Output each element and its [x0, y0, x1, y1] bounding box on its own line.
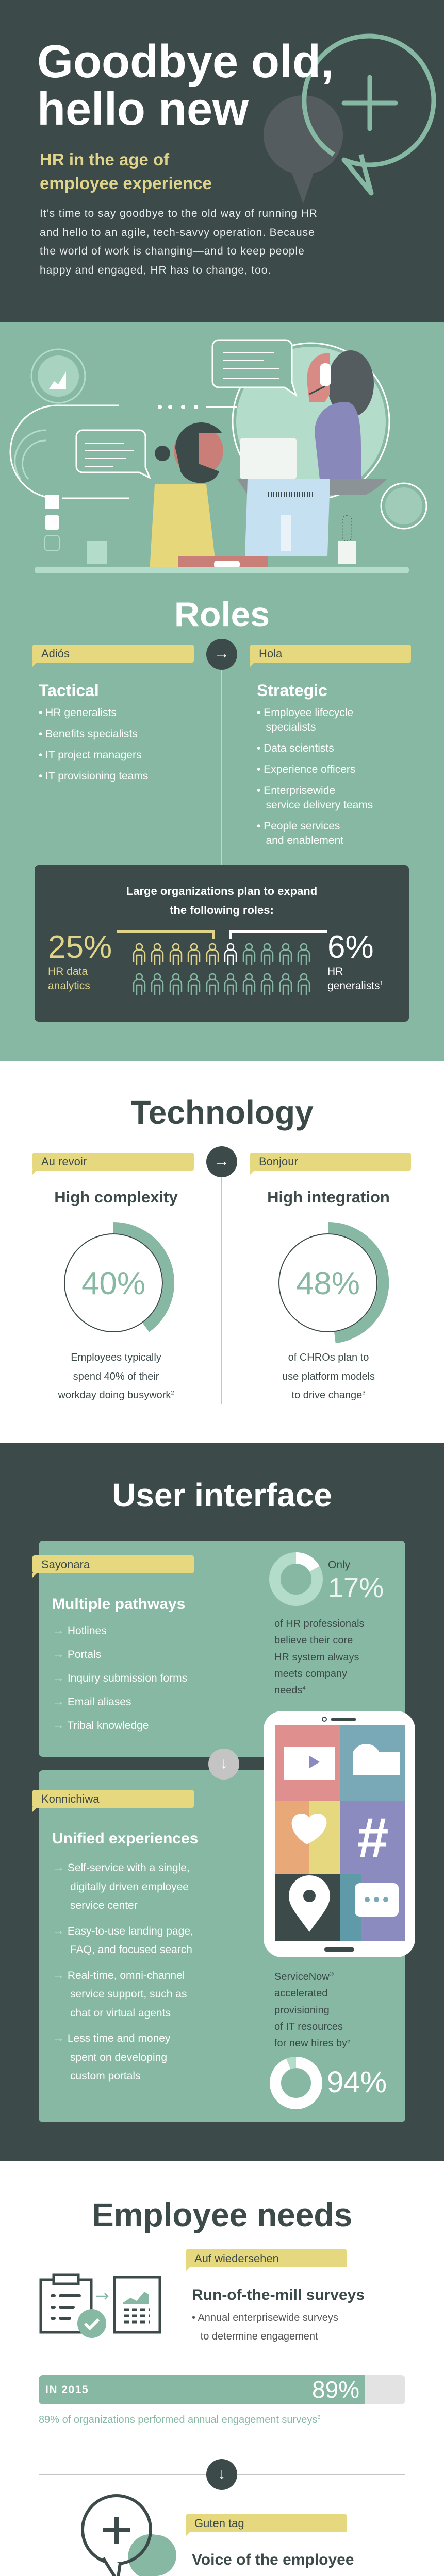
intro text: happy and engaged, HR has to change, too.	[40, 264, 271, 276]
tag: Guten tag: Guten tag	[194, 2517, 244, 2530]
stat: 6%: HR	[327, 965, 343, 977]
heading: high integration: High integration	[267, 1188, 390, 1206]
stat: 94%: 94%	[327, 2065, 387, 2099]
run-of-the-mill text: to determine engagement	[201, 2331, 318, 2342]
phone illustration	[264, 1711, 415, 1957]
unified experiences list: digitally driven employee	[70, 1880, 189, 1893]
caption: CHROs	[282, 1352, 375, 1401]
arrow circle	[206, 639, 237, 670]
stat text: needs4	[274, 1685, 306, 1696]
pictogram chart	[117, 930, 327, 995]
divider with arrow: ↓	[218, 2465, 226, 2482]
stat: 25%: analytics	[48, 980, 90, 992]
unified experiences list: → Less time and money	[52, 2031, 170, 2045]
stat text: provisioning	[274, 1971, 350, 2049]
panel: strategic: • Experience officers	[257, 764, 355, 775]
caption: busywork: workday doing busywork2	[58, 1389, 174, 1401]
donut: 48%: 48%	[296, 1266, 360, 1301]
divider	[221, 1162, 222, 1404]
unified experiences list: custom portals	[70, 2070, 141, 2082]
stat: 25%: HR data	[48, 965, 88, 977]
bar chart: 2015: 89%	[312, 2376, 359, 2403]
donut: 94%	[270, 2057, 322, 2109]
intro text: It’s time to say goodbye to the old way of running HR	[40, 208, 318, 219]
icon: clipboard to report	[39, 2273, 161, 2338]
stat: 6%: generalists1	[327, 980, 383, 992]
stat text: HR system always	[274, 1652, 359, 1663]
stat: 17%: Only	[328, 1559, 350, 1571]
donut: 40%: 40%	[81, 1266, 145, 1301]
bar chart: 2015: IN 2015	[45, 2384, 89, 2396]
heading: Roles: Roles	[174, 595, 270, 634]
panel: tactical: • HR generalists	[39, 707, 117, 719]
tag: Au revoir: Au revoir	[41, 1155, 87, 1168]
tag: Sayonara	[32, 1555, 194, 1573]
panel: tactical: • IT provisioning teams	[39, 770, 148, 782]
panel: strategic: service delivery teams	[266, 799, 373, 811]
stat: 6%: 6%	[327, 929, 374, 965]
icon: voice bubbles	[81, 2494, 176, 2576]
stat: 17%: 17%	[328, 1572, 384, 1603]
panel: roles expansion stat	[35, 865, 409, 1022]
run-of-the-mill text: Run-of-the-mill surveys	[192, 2286, 365, 2303]
unified experiences list: → Real-time, omni-channel	[52, 1968, 185, 1981]
panel: strategic: • Data scientists	[257, 742, 334, 754]
panel: tactical: Tactical	[39, 681, 99, 700]
stat text: provisioning: for new hires by5	[274, 2038, 350, 2049]
tag: Konnichiwa	[32, 1790, 194, 1808]
arrow circle: →	[214, 1153, 229, 1170]
panel: strategic: • Enterprisewide	[257, 785, 335, 796]
subtitle	[40, 150, 212, 193]
stat text: of HR professionals	[274, 1618, 365, 1630]
unified experiences list: spent on developing	[70, 2052, 167, 2063]
caption: CHROs: to drive change3	[292, 1389, 365, 1401]
tag: Bonjour: Bonjour	[259, 1155, 298, 1168]
subtitle: HR in the age of	[40, 150, 169, 169]
stat heading	[126, 885, 317, 917]
stat text: provisioning: of IT resources	[274, 2021, 343, 2032]
unified experiences list: service center	[70, 1900, 138, 1911]
stat text: meets company	[274, 1668, 347, 1680]
unified experiences list: FAQ, and focused search	[70, 1944, 192, 1956]
caption: busywork: Employees typically	[71, 1352, 161, 1363]
panel: strategic: and enablement	[266, 835, 343, 846]
phone illustration: #	[357, 1806, 389, 1870]
down arrow circle: ↓	[220, 1755, 228, 1772]
stat text: provisioning: accelerated	[274, 1988, 327, 1999]
tag: Sayonara: Sayonara	[41, 1558, 90, 1571]
voice of the employee text: Voice of the employee	[192, 2551, 354, 2568]
stat text: provisioning: provisioning	[274, 2005, 330, 2016]
unified experiences list: service support, such as	[70, 1988, 187, 2000]
donut: 48%	[278, 1222, 389, 1344]
stat: 6%	[327, 929, 383, 992]
icon: speech bubbles with plus	[264, 34, 436, 203]
multiple pathways list: → Tribal knowledge	[52, 1718, 149, 1732]
stat: 17%	[328, 1559, 384, 1603]
intro text: the world of work is changing—and to keep people	[40, 245, 305, 257]
bar chart: 2015	[39, 2375, 405, 2404]
tag: Hola: Hola	[259, 647, 282, 660]
panel: strategic	[257, 681, 373, 846]
unified experiences list: Unified experiences	[52, 1830, 198, 1847]
run-of-the-mill text	[192, 2286, 365, 2342]
panel: strategic: specialists	[266, 721, 316, 733]
unified experiences list: chat or virtual agents	[70, 2007, 171, 2019]
unified experiences list: → Self-service with a single,	[52, 1860, 190, 1874]
tag: Adiós	[32, 645, 194, 663]
tag: Auf wiedersehen	[186, 2249, 347, 2267]
heading: Technology: Technology	[130, 1094, 314, 1131]
tag: Konnichiwa: Konnichiwa	[41, 1792, 100, 1805]
arrow circle	[206, 1146, 237, 1177]
subtitle: employee experience	[40, 174, 212, 193]
panel: strategic: Strategic	[257, 681, 327, 700]
stat: 25%	[48, 929, 112, 992]
caption: busywork: spend 40% of their	[73, 1370, 159, 1382]
tag: Guten tag	[186, 2514, 347, 2532]
heading: User interface: User interface	[112, 1477, 332, 1514]
run-of-the-mill text: • Annual enterprisewide surveys	[192, 2312, 338, 2324]
multiple pathways list: Multiple pathways	[52, 1596, 185, 1613]
caption: CHROs: of CHROs plan to	[288, 1352, 369, 1363]
tag: Auf wiedersehen: Auf wiedersehen	[194, 2252, 279, 2265]
heading: Employee needs: Employee needs	[92, 2196, 352, 2233]
stat text: provisioning: ServiceNow®	[274, 1971, 334, 1982]
caption: 89%: 89% of organizations performed annual engagement surveys6	[39, 2414, 320, 2426]
heading: high complexity: High complexity	[54, 1188, 178, 1206]
stat text	[274, 1618, 365, 1696]
panel: tactical	[39, 681, 148, 782]
title: hello new	[37, 83, 249, 135]
tag: Au revoir	[32, 1153, 194, 1171]
multiple pathways list: → Portals	[52, 1647, 101, 1661]
multiple pathways list: → Hotlines	[52, 1623, 107, 1637]
multiple pathways list: → Email aliases	[52, 1694, 131, 1708]
tag: Hola	[250, 645, 411, 663]
title	[37, 36, 334, 135]
caption: CHROs: use platform models	[282, 1370, 375, 1382]
title: Goodbye old,	[37, 36, 334, 88]
stat: 25%: 25%	[48, 929, 112, 965]
panel: sayonara	[39, 1541, 405, 1757]
intro text: and hello to an agile, tech-savvy operation. Because	[40, 227, 315, 238]
stat heading: the following roles:	[170, 904, 274, 917]
panel: tactical: • IT project managers	[39, 749, 142, 761]
donut: 17%	[269, 1552, 323, 1606]
hero illustration	[9, 339, 427, 573]
donut: 40%	[64, 1222, 174, 1332]
caption: busywork	[58, 1352, 174, 1401]
panel: tactical: • Benefits specialists	[39, 728, 138, 740]
multiple pathways list	[52, 1596, 187, 1732]
divider line	[221, 654, 222, 865]
down arrow circle	[208, 1749, 239, 1780]
intro text	[40, 208, 318, 276]
stat heading: Large organizations plan to expand	[126, 885, 317, 897]
stat text: believe their core	[274, 1635, 353, 1646]
multiple pathways list: → Inquiry submission forms	[52, 1671, 187, 1685]
tag: Adiós: Adiós	[41, 647, 70, 660]
unified experiences list	[52, 1830, 198, 2082]
panel: strategic: • People services	[257, 820, 340, 832]
arrow circle: →	[214, 645, 229, 662]
panel: konnichiwa	[39, 1770, 405, 2122]
unified experiences list: → Easy-to-use landing page,	[52, 1924, 193, 1937]
panel: strategic: • Employee lifecycle	[257, 707, 353, 719]
tag: Bonjour	[250, 1153, 411, 1171]
